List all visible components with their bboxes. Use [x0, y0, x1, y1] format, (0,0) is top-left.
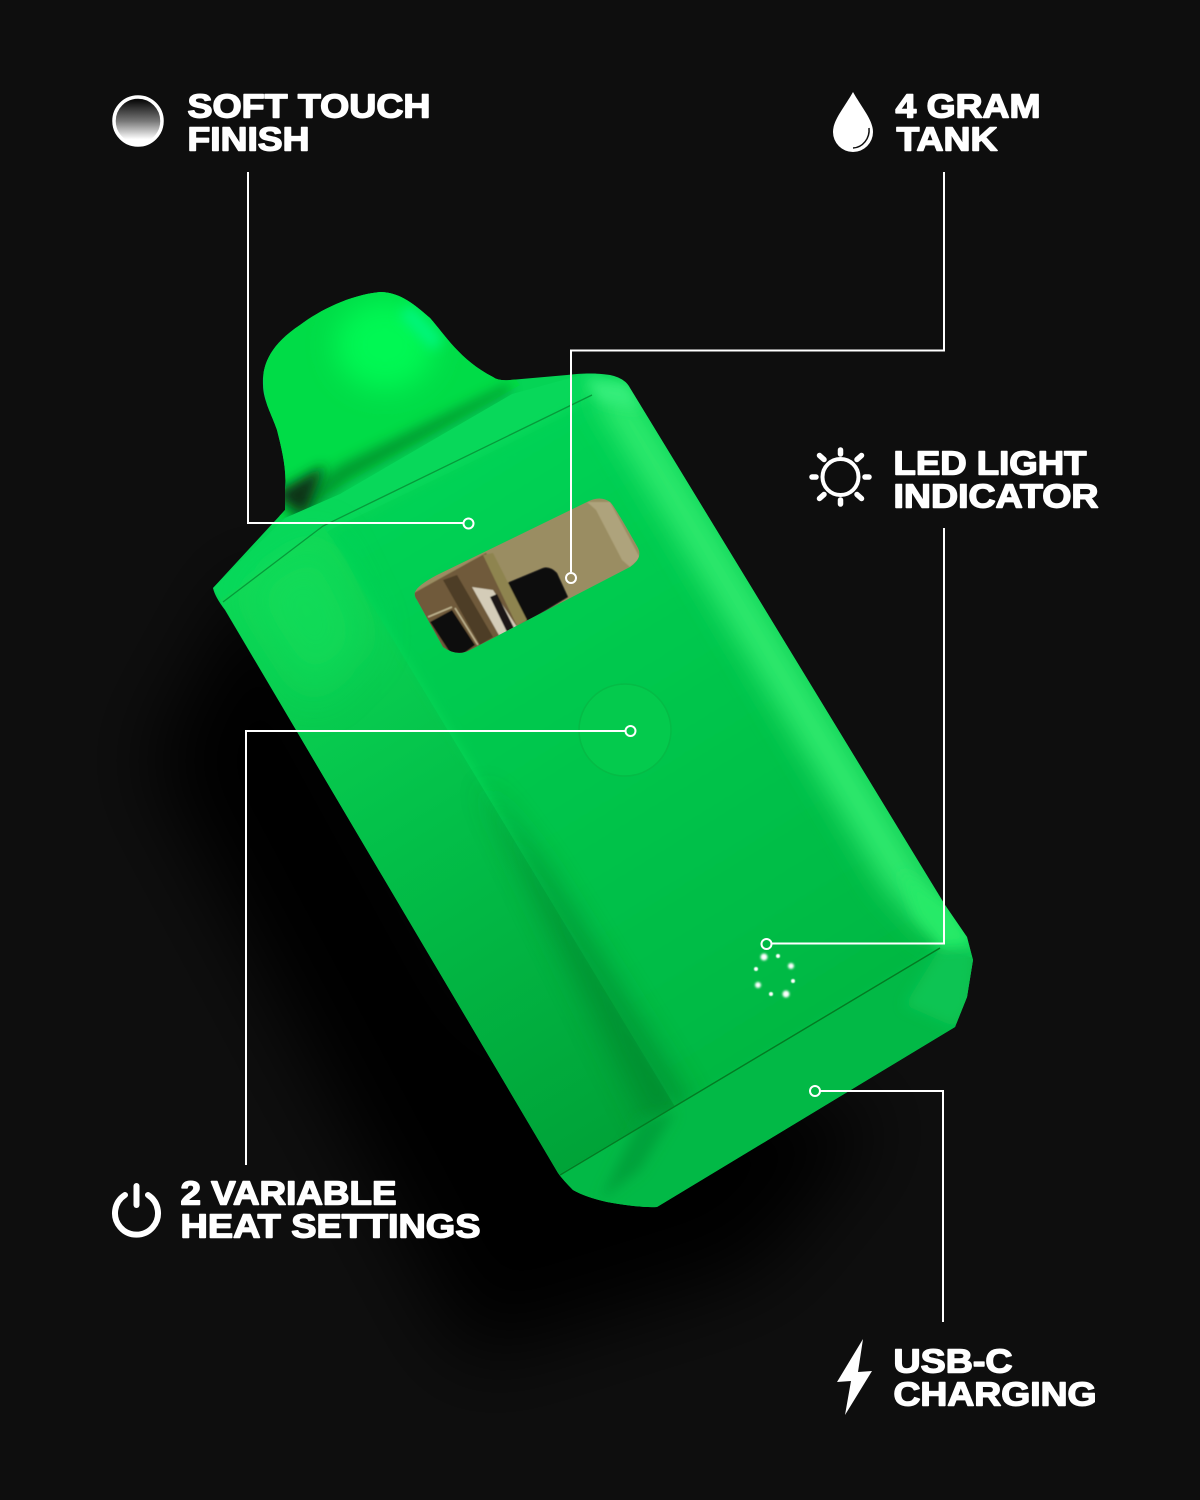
icon: power	[115, 1186, 158, 1235]
leader line	[246, 731, 625, 1165]
callout: soft touch finish	[114, 88, 474, 528]
label: USB-C	[894, 1342, 1012, 1380]
button	[579, 684, 671, 776]
bottom cap face	[558, 948, 980, 1215]
window	[414, 498, 640, 653]
label: 2 VARIABLE	[180, 1174, 396, 1212]
marker	[626, 726, 636, 736]
left bevel face	[220, 527, 680, 1178]
body silhouette	[213, 292, 973, 1207]
label: SOFT TOUCH	[188, 88, 430, 124]
callout: USB-C charging	[810, 1086, 1096, 1415]
front face	[430, 393, 946, 1104]
label: FINISH	[188, 120, 310, 158]
label: TANK	[896, 120, 998, 158]
marker	[566, 573, 576, 583]
icon: lightning bolt	[837, 1339, 872, 1415]
top shoulder face	[213, 374, 596, 588]
callout: 2 variable heat settings	[115, 726, 635, 1244]
leader line	[772, 528, 944, 944]
leader line	[571, 172, 944, 572]
device: green vape body	[213, 280, 980, 1215]
label: LED LIGHT	[894, 444, 1086, 482]
mouthpiece	[255, 280, 520, 520]
icon: water drop	[833, 92, 873, 152]
device shadow	[150, 560, 880, 1360]
lower bevel dark band	[492, 802, 694, 1115]
callout: 4 gram tank	[566, 88, 1040, 583]
bottom seam	[560, 948, 940, 1175]
label: HEAT SETTINGS	[180, 1208, 480, 1244]
label: INDICATOR	[894, 478, 1099, 514]
label: CHARGING	[894, 1376, 1096, 1412]
leader line	[820, 1091, 943, 1322]
icon: sun	[812, 450, 869, 504]
top seam	[223, 395, 592, 602]
LED light ring	[754, 954, 795, 998]
left bevel highlight	[300, 610, 338, 658]
right bevel face	[592, 388, 945, 940]
bottom right bevel	[905, 945, 975, 1027]
bottom cap shade	[606, 1114, 671, 1192]
icon: gradient orb	[114, 97, 162, 145]
marker	[464, 518, 474, 528]
mouthpiece base shadow	[285, 383, 510, 525]
label: 4 GRAM	[896, 88, 1040, 124]
marker	[762, 939, 772, 949]
marker	[810, 1086, 820, 1096]
callout: LED light indicator	[762, 444, 1099, 949]
leader line	[248, 172, 463, 523]
